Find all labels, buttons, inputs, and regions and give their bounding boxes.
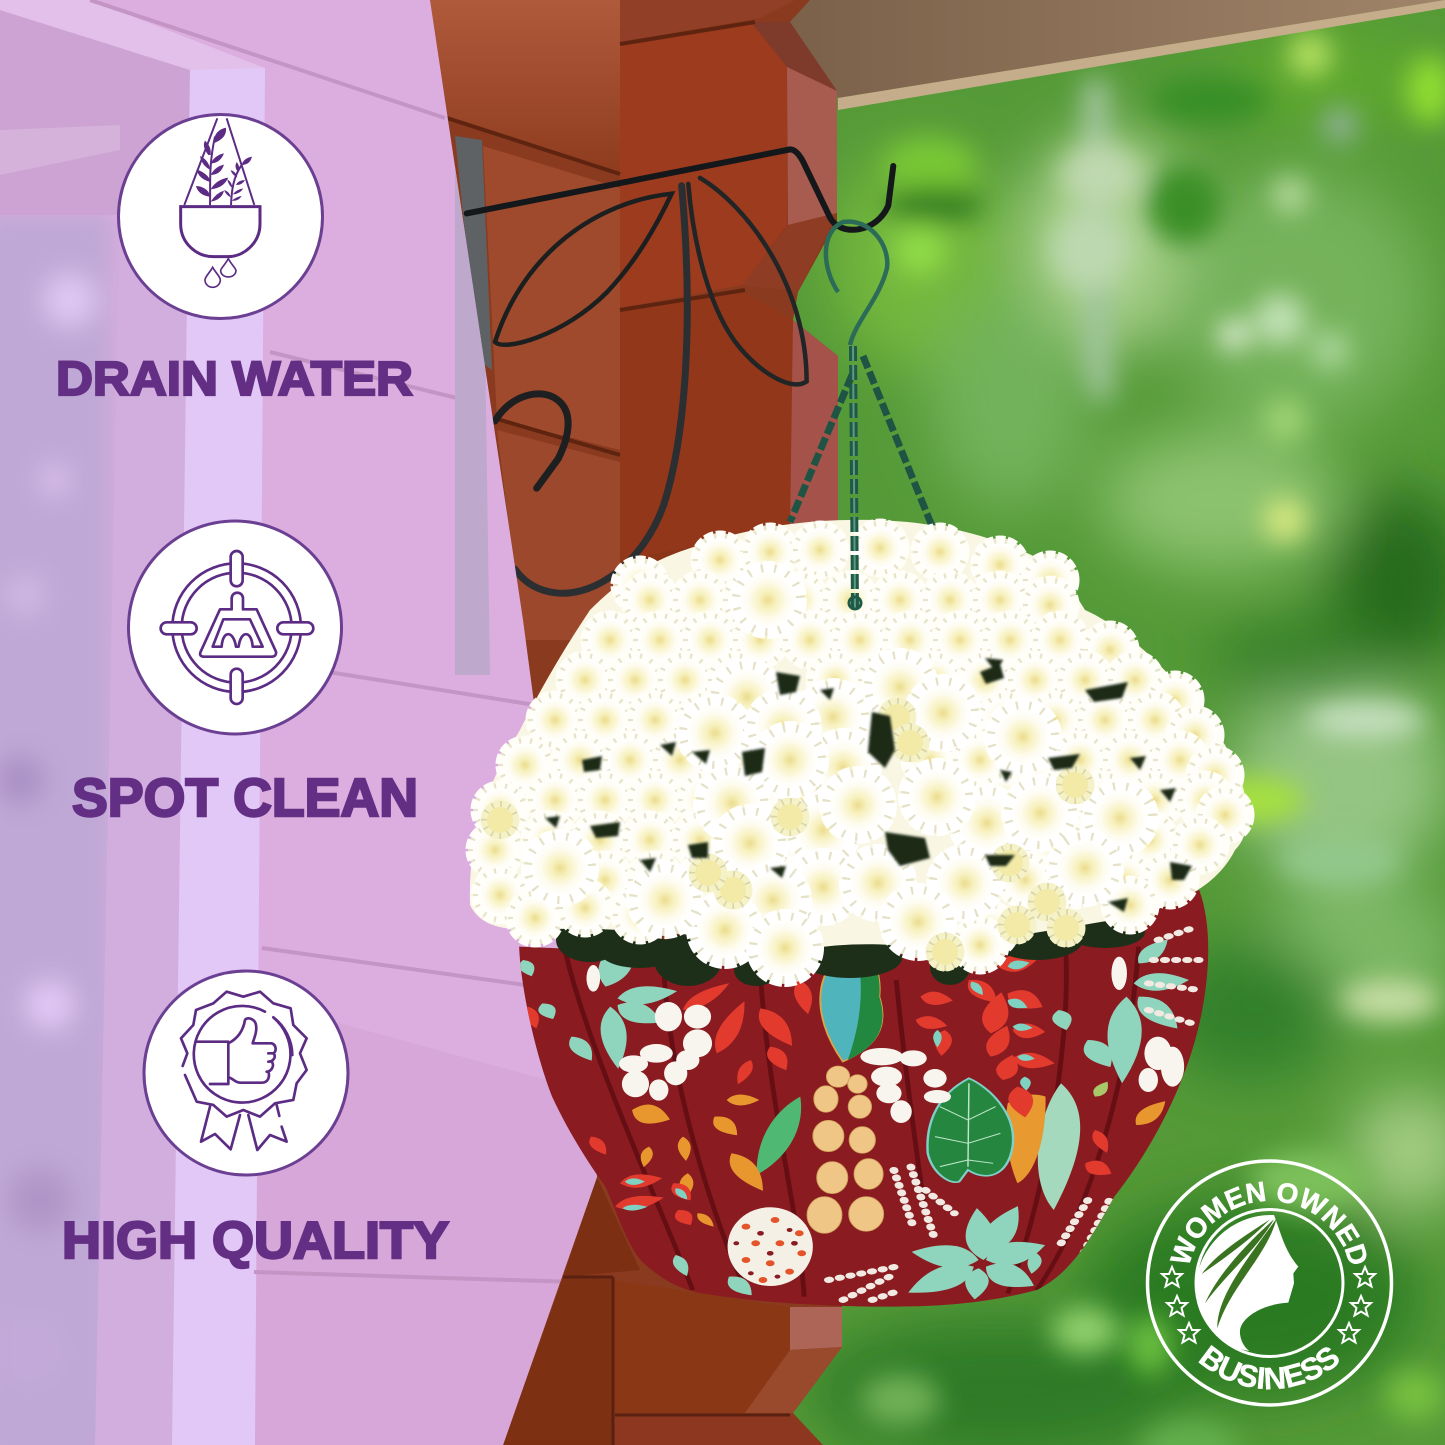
curved text: WOMEN OWNED [1170,1181,1366,1264]
icon: thumbs-up rosette [181,992,307,1150]
leaf print: white flowers [587,957,1184,1123]
medium blooms [468,521,1252,972]
small yellow blooms [481,698,1094,971]
lilac translucent panel over wall [0,0,620,1445]
woman profile [1196,1215,1298,1351]
lower wall tint [503,1174,597,1445]
bracket plate seen through panel [455,135,490,675]
leaf print: large orange leaf [1006,1095,1046,1183]
hook and side chains [790,222,932,526]
leaf print: teal leaves [516,931,1190,1302]
women owned business seal: BUSINESS [1198,1345,1339,1390]
wooden post [430,0,842,1445]
wall bracket [467,149,893,593]
far-left blurred lavender area [0,210,115,1445]
feature: drain water [56,114,413,406]
fabric basket cover with leaf print [500,890,1230,1320]
dark foliage under the blooms [556,916,1145,986]
label: SPOT CLEAN [72,768,418,828]
label: DRAIN WATER [56,353,413,406]
dark gaps between blooms [545,658,1192,912]
feature: spot clean [72,521,418,828]
label: HIGH QUALITY [62,1212,449,1270]
leaf print: white cluster with orange centres [728,1207,813,1286]
stars [1162,1267,1375,1342]
large front blooms [524,564,1156,984]
badge circle [144,971,348,1175]
leaf print: yellow berry discs [807,1066,884,1233]
centre chain over the blooms [849,346,861,609]
leaf print: green heart leaf [927,1078,1013,1182]
door frame and vertical strips [95,215,190,1445]
badge circle [128,521,342,734]
badge circle [118,114,322,318]
fabric folds [564,947,1139,1297]
ceiling beam [790,0,1445,110]
white chrysanthemum dome [468,520,1252,984]
leaf print: teal leaf centres [622,958,1036,1211]
door recess at top-left [0,10,190,215]
leaf print: green stripe leaf [757,1097,801,1175]
leaf print: lacy white fronds [828,927,1202,1300]
leaf print: red leaves [521,952,1117,1228]
leaf print: orange leaves [627,1079,1173,1229]
women owned business seal [1146,1159,1394,1407]
icon: hanging planter with drops [181,118,260,287]
leaf print: big blue-green leaf [819,974,884,1063]
plank joints [90,0,575,1282]
feature: high quality [62,971,449,1270]
icon: target with broom [161,551,313,704]
leaf print: long pale leaf [1038,1083,1080,1210]
